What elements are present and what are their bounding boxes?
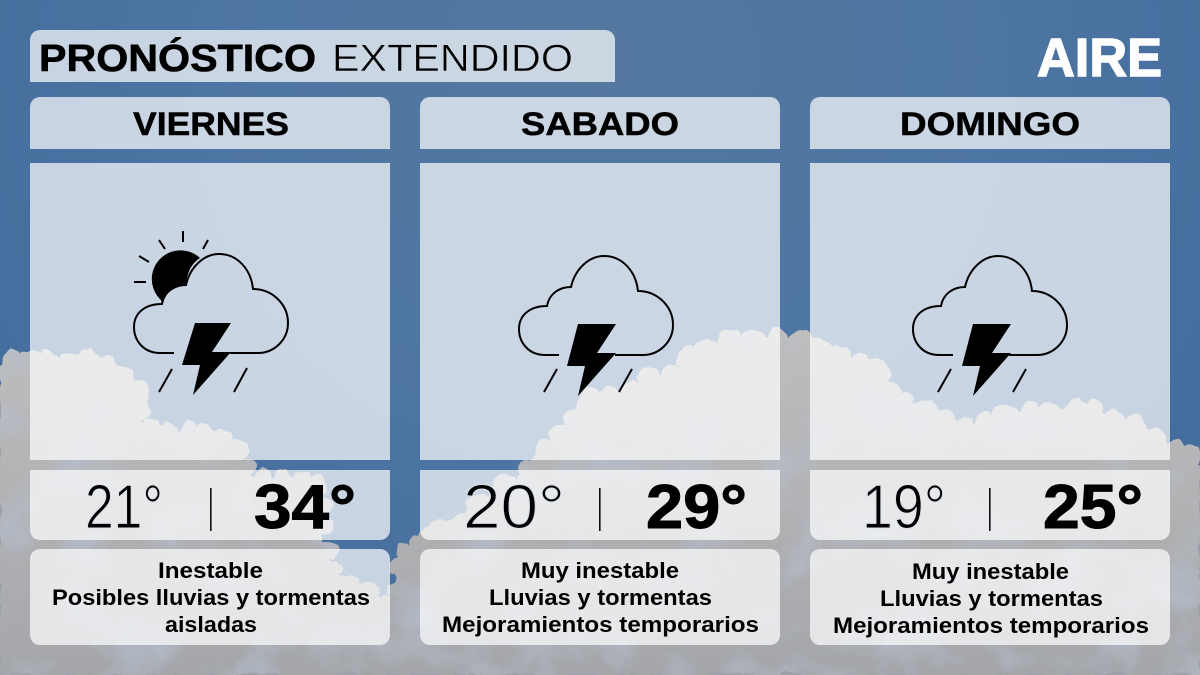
description box: Domingo bbox=[810, 549, 1170, 645]
day header: Viernes: VIERNES bbox=[133, 106, 289, 142]
day header: Sabado: SABADO bbox=[521, 106, 679, 142]
description box: Domingo: Lluvias y tormentas bbox=[880, 586, 1103, 611]
temperature box: Viernes: 21° bbox=[85, 473, 163, 542]
icon: sun, cloud and storm bbox=[134, 231, 288, 395]
description box: Viernes: Posibles lluvias y tormentas bbox=[52, 585, 370, 610]
heading: PRONÓSTICO EXTENDIDO bbox=[39, 36, 573, 80]
image panel: Domingo bbox=[810, 163, 1170, 460]
temperature box: Domingo bbox=[810, 470, 1170, 542]
heading: PRONÓSTICO EXTENDIDO: EXTENDIDO bbox=[332, 38, 573, 80]
temperature box: Viernes bbox=[30, 470, 390, 542]
description box: Domingo: Mejoramientos temporarios bbox=[833, 613, 1149, 638]
description box: Viernes: Inestable bbox=[158, 558, 263, 583]
temperature box: Domingo: 19° bbox=[862, 473, 946, 542]
description box: Domingo: Muy inestable bbox=[912, 559, 1069, 584]
heading: PRONÓSTICO EXTENDIDO: PRONÓSTICO bbox=[39, 36, 316, 80]
icon: cloud and storm bbox=[519, 256, 673, 396]
icon: cloud and storm bbox=[913, 256, 1067, 396]
description box: Viernes bbox=[30, 549, 390, 645]
description box: Viernes: aisladas bbox=[165, 612, 257, 637]
background: clouds bbox=[0, 328, 1200, 675]
panel: title bar bbox=[30, 30, 615, 82]
panel: Sabado bbox=[420, 97, 780, 645]
temperature box: Sabado: 29° bbox=[646, 473, 747, 542]
description box: Sabado bbox=[420, 549, 780, 645]
panel: Domingo bbox=[810, 97, 1170, 645]
day header: Domingo: DOMINGO bbox=[900, 106, 1080, 142]
day header: Domingo bbox=[810, 97, 1170, 149]
temperature box: Domingo: 25° bbox=[1043, 473, 1143, 542]
day header: Sabado bbox=[420, 97, 780, 149]
image panel: Viernes bbox=[30, 163, 390, 460]
description box: Sabado: Mejoramientos temporarios bbox=[442, 612, 759, 637]
temperature box: Sabado bbox=[420, 470, 780, 542]
day header: Viernes bbox=[30, 97, 390, 149]
temperature box: Sabado: 20° bbox=[463, 473, 565, 542]
description box: Sabado: Muy inestable bbox=[521, 558, 679, 583]
image panel: Sabado bbox=[420, 163, 780, 460]
panel: Viernes bbox=[30, 97, 390, 645]
description box: Sabado: Lluvias y tormentas bbox=[489, 585, 712, 610]
temperature box: Viernes: 34° bbox=[254, 473, 356, 542]
logo: AIRE: AIRE bbox=[1037, 28, 1162, 88]
